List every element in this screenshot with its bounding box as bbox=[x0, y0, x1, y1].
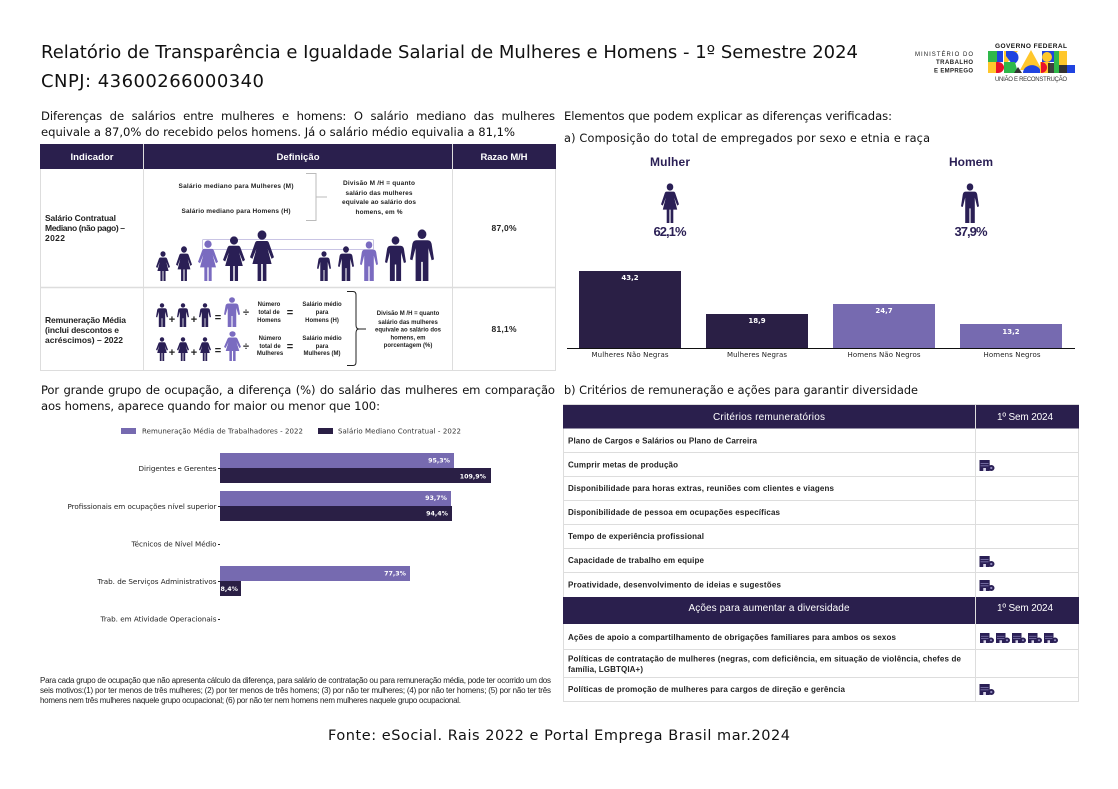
value: 87,0%: 87,0% bbox=[492, 223, 517, 233]
definition: remuneração média homens e mulheres: Homens bbox=[257, 318, 281, 324]
definition: remuneração média homens e mulheres: + bbox=[191, 347, 197, 359]
definition: remuneração média homens e mulheres: salário das mulheres bbox=[378, 320, 439, 326]
logo: ministério do trabalho e emprego: MINISTÉRIO DO bbox=[915, 51, 973, 58]
panel: critérios e ações bbox=[563, 404, 1079, 702]
table header: Definição bbox=[276, 152, 320, 163]
definition: salário mediano: Divisão M /H = quanto bbox=[343, 180, 415, 187]
title: Relatório de Transparência e Igualdade Salarial de Mulheres e Homens - 1º Semestre 2024 bbox=[41, 42, 858, 63]
footnote bbox=[40, 676, 551, 705]
bar chart: ocupação: Trab. de Serviços Administrativos bbox=[96, 577, 217, 586]
definition: remuneração média homens e mulheres: equivale ao salário dos bbox=[375, 328, 442, 334]
heading: elementos: Elementos que podem explicar as diferenças verificadas: bbox=[564, 109, 892, 123]
bar chart: ocupação: 94,4% bbox=[426, 510, 449, 518]
bar chart: ocupação: 8,4% bbox=[220, 586, 239, 593]
icons: critérios bbox=[980, 460, 994, 591]
header: critérios remuneratórios bbox=[563, 405, 1079, 428]
criteria rows bbox=[568, 436, 835, 590]
criteria rows: Capacidade de trabalho em equipe bbox=[568, 556, 705, 565]
panel: homem: Homem bbox=[949, 155, 993, 169]
criteria rows: Proatividade, desenvolvimento de ideias e sugestões bbox=[568, 580, 782, 590]
header: critérios remuneratórios: 1º Sem 2024 bbox=[997, 412, 1053, 423]
row label: salário contratual mediano: 2022 bbox=[45, 233, 65, 243]
definition: remuneração média homens e mulheres: Número bbox=[259, 336, 282, 342]
definition: remuneração média homens e mulheres: ÷ bbox=[243, 341, 249, 353]
legend: Salário Mediano Contratual - 2022 bbox=[338, 428, 461, 436]
intro text: diferenças de salários: Diferenças de salários entre mulheres e homens: O salário mediano das mulheres bbox=[41, 109, 555, 123]
panel: mulher: Mulher bbox=[650, 155, 690, 169]
table header: Razao M/H bbox=[480, 152, 528, 163]
definition: remuneração média homens e mulheres bbox=[156, 292, 442, 366]
definition: remuneração média homens e mulheres: ÷ bbox=[243, 307, 249, 319]
row label: remuneração média bbox=[45, 315, 126, 345]
definition: remuneração média homens e mulheres: Salário médio bbox=[302, 302, 342, 308]
action rows: família, LGBTQIA+) bbox=[568, 665, 643, 674]
legend bbox=[121, 428, 461, 436]
definition: remuneração média homens e mulheres: porcentagem (%) bbox=[384, 343, 432, 349]
definition: remuneração média homens e mulheres: homens, em bbox=[390, 336, 426, 342]
definition: salário mediano bbox=[178, 174, 416, 220]
title: CNPJ: 43600266000340 bbox=[41, 71, 264, 92]
bar chart: ocupação: Técnicos de Nível Médio bbox=[130, 540, 216, 548]
logo: ministério do trabalho e emprego: E EMPREGO bbox=[934, 68, 973, 74]
bar chart: ocupação: 95,3% bbox=[428, 458, 451, 464]
action rows: Ações de apoio a compartilhamento de obrigações familiares para ambos os sexos bbox=[568, 633, 897, 642]
icon row: mediana de mulheres e homens bbox=[156, 229, 434, 281]
bar chart: composição: 24,7 bbox=[875, 307, 893, 315]
definition: remuneração média homens e mulheres: = bbox=[287, 307, 293, 319]
bar chart: ocupação: 93,7% bbox=[425, 495, 448, 502]
definition: remuneração média homens e mulheres: Mulheres (M) bbox=[303, 351, 341, 357]
footnote: homens nem três mulheres naquele grupo ocupacional; (6) por não ter nem homens nem mulheres naquele grupo ocupacional. bbox=[40, 696, 461, 705]
heading: composição: a) Composição do total de empregados por sexo e etnia e raça bbox=[564, 132, 930, 145]
source: Fonte: eSocial. Rais 2022 e Portal Emprega Brasil mar.2024 bbox=[328, 728, 790, 744]
row label: remuneração média: acréscimos) – 2022 bbox=[45, 335, 123, 345]
bar chart: composição: 43,2 bbox=[621, 274, 639, 282]
row label: salário contratual mediano: Salário Contratual bbox=[45, 213, 116, 223]
intro text: diferenças de salários bbox=[41, 109, 555, 139]
logo: governo federal brasil bbox=[988, 43, 1075, 83]
bar chart: composição: 18,9 bbox=[748, 317, 766, 325]
panel: tabela de indicadores bbox=[40, 144, 556, 371]
bar chart: ocupação: Trab. em Atividade Operacionais bbox=[100, 614, 217, 624]
definition: remuneração média homens e mulheres: Salário médio bbox=[302, 336, 342, 342]
table header bbox=[70, 152, 528, 163]
definition: salário mediano: equivale ao salário dos bbox=[342, 199, 416, 206]
title bbox=[41, 42, 858, 92]
definition: remuneração média homens e mulheres: + bbox=[191, 314, 197, 326]
heading: critérios: b) Critérios de remuneração e ações para garantir diversidade bbox=[564, 384, 918, 397]
heading: grande grupo de ocupação: Por grande grupo de ocupação, a diferença (%) do salário das mulheres em comparação bbox=[41, 383, 555, 397]
intro text: diferenças de salários: equivale a 87,0% do recebido pelos homens. Já o salário médio equivalia a 81,1% bbox=[41, 125, 515, 139]
logo: ministério do trabalho e emprego bbox=[915, 51, 973, 74]
definition: remuneração média homens e mulheres: Número bbox=[258, 302, 281, 308]
heading: grande grupo de ocupação: aos homens, aparece quando for maior ou menor que 100: bbox=[41, 399, 380, 413]
bar chart: ocupação: Dirigentes e Gerentes bbox=[138, 464, 217, 473]
definition: remuneração média homens e mulheres: para bbox=[316, 344, 329, 350]
criteria rows: Plano de Cargos e Salários ou Plano de Carreira bbox=[568, 436, 758, 446]
panel: mulher: 62,1% bbox=[654, 224, 687, 239]
bar chart: composição: Homens Não Negros bbox=[848, 351, 921, 359]
row label: remuneração média: (inclui descontos e bbox=[45, 325, 119, 335]
criteria rows: Cumprir metas de produção bbox=[568, 460, 678, 470]
definition: remuneração média homens e mulheres: = bbox=[215, 312, 221, 324]
definition: remuneração média homens e mulheres: = bbox=[215, 345, 221, 357]
definition: remuneração média homens e mulheres: Homens (H) bbox=[305, 318, 339, 324]
criteria rows: Disponibilidade de pessoa em ocupações específicas bbox=[568, 508, 781, 517]
panel: homem: 37,9% bbox=[954, 224, 988, 239]
action rows: Políticas de promoção de mulheres para cargos de direção e gerência bbox=[568, 685, 846, 694]
header: critérios remuneratórios: Critérios remuneratórios bbox=[713, 412, 825, 423]
value: 81,1%: 81,1% bbox=[492, 324, 517, 334]
bar chart: composição bbox=[567, 271, 1075, 359]
bar chart: ocupação: Profissionais em ocupações nível superior bbox=[68, 502, 217, 511]
header: ações para aumentar a diversidade: Ações para aumentar a diversidade bbox=[688, 603, 850, 614]
definition: remuneração média homens e mulheres: = bbox=[287, 341, 293, 353]
bar chart: ocupação: 77,3% bbox=[384, 570, 407, 578]
criteria rows: Disponibilidade para horas extras, reuniões com clientes e viagens bbox=[568, 484, 835, 493]
definition: salário mediano: Salário mediano para Homens (H) bbox=[182, 208, 290, 215]
definition: salário mediano: homens, em % bbox=[356, 209, 403, 216]
definition: remuneração média homens e mulheres: + bbox=[169, 314, 175, 326]
definition: remuneração média homens e mulheres: + bbox=[169, 347, 175, 359]
legend: Remuneração Média de Trabalhadores - 2022 bbox=[142, 428, 303, 436]
panel: homem bbox=[949, 155, 993, 239]
action rows bbox=[568, 633, 962, 694]
definition: remuneração média homens e mulheres: Divisão M /H = quanto bbox=[377, 311, 440, 317]
table header: Indicador bbox=[70, 152, 114, 163]
footnote: seis motivos:(1) por ter menos de três mulheres; (2) por ter menos de três homens; (3) por não ter mulheres; (4) por não ter homens; (5) por não ter três bbox=[40, 686, 551, 695]
bar chart: composição: Homens Negros bbox=[984, 351, 1041, 359]
row label: remuneração média: Remuneração Média bbox=[45, 315, 126, 325]
heading: grande grupo de ocupação bbox=[41, 383, 555, 413]
definition: salário mediano: Salário mediano para Mulheres (M) bbox=[178, 183, 294, 190]
criteria rows: Tempo de experiência profissional bbox=[568, 532, 704, 541]
icons: ações bbox=[980, 633, 1058, 695]
bar chart: composição: Mulheres Não Negras bbox=[592, 351, 669, 359]
header: ações para aumentar a diversidade: 1º Sem 2024 bbox=[997, 603, 1053, 614]
logo: ministério do trabalho e emprego: TRABALHO bbox=[936, 60, 973, 66]
definition: remuneração média homens e mulheres: Mulheres bbox=[257, 351, 284, 357]
definition: remuneração média homens e mulheres: total de bbox=[259, 344, 281, 350]
header: ações para aumentar a diversidade bbox=[563, 597, 1079, 624]
bar chart: ocupação bbox=[68, 453, 491, 624]
definition: remuneração média homens e mulheres: total de bbox=[258, 310, 280, 316]
footnote: Para cada grupo de ocupação que não apresenta cálculo da diferença, para salário de contratação ou para remuneração média, pode ter ocorrido um dos bbox=[40, 676, 551, 685]
logo: governo federal brasil: GOVERNO FEDERAL bbox=[995, 43, 1067, 50]
definition: remuneração média homens e mulheres: para bbox=[316, 310, 329, 316]
action rows: Políticas de contratação de mulheres (negras, com deficiência, em situação de violência, chefes de bbox=[568, 654, 962, 664]
bar chart: ocupação: 109,9% bbox=[460, 474, 487, 480]
bar chart: composição: Mulheres Negras bbox=[727, 351, 787, 359]
row label: salário contratual mediano: Mediano (não pago) – bbox=[45, 223, 125, 233]
panel: mulher bbox=[650, 155, 690, 239]
definition: salário mediano: salário das mulheres bbox=[346, 190, 413, 197]
logo: governo federal brasil: UNIÃO E RECONSTRUÇÃO bbox=[995, 76, 1067, 83]
row label: salário contratual mediano bbox=[45, 213, 125, 243]
bar chart: composição: 13,2 bbox=[1002, 328, 1020, 336]
